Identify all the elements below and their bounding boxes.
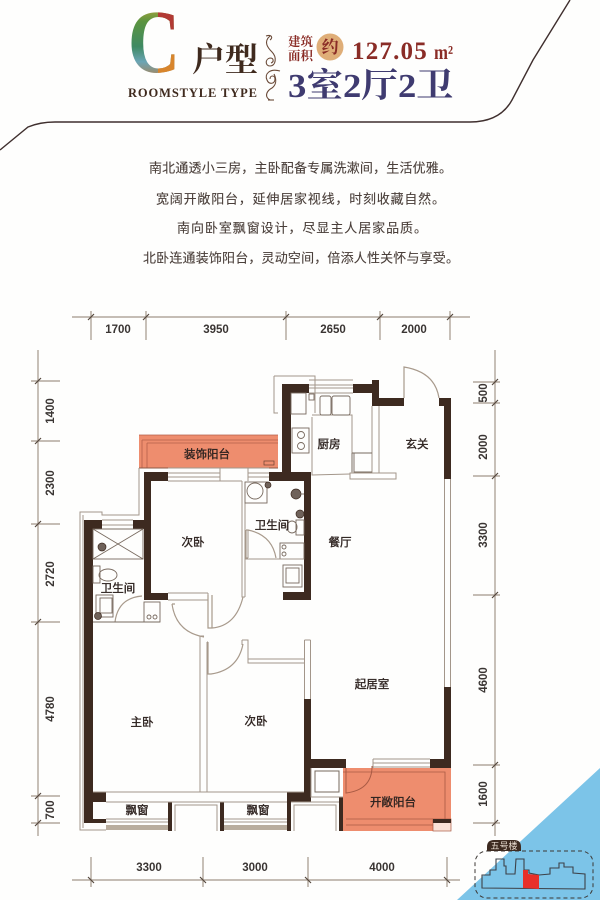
label: bay window 1: 飘窗	[126, 803, 148, 817]
bottom dimensions	[72, 857, 460, 887]
floor plan	[80, 367, 451, 831]
label: bay window 2: 飘窗	[246, 803, 270, 817]
dashed frame	[475, 851, 593, 898]
label: entry: 玄关	[406, 437, 429, 451]
big letter C	[132, 12, 174, 73]
doors	[115, 367, 439, 674]
label: open balcony: 开敞阳台	[370, 795, 416, 809]
decorative balcony	[139, 435, 278, 468]
subtitle: roomstyle type: ROOMSTYLE TYPE	[128, 86, 257, 100]
line 4: 北卧连通装饰阳台，灵动空间，倍添人性关怀与享受。	[143, 250, 459, 266]
second bathroom fixtures	[245, 482, 304, 587]
value 4780: 4780	[45, 696, 57, 722]
value 3300: 3300	[136, 862, 162, 874]
label: dining: 餐厅	[328, 535, 352, 549]
label: living: 起居室	[355, 677, 389, 691]
open balcony	[343, 766, 451, 831]
value 2720: 2720	[45, 561, 57, 587]
value 2300: 2300	[45, 470, 57, 496]
label: kitchen: 厨房	[318, 438, 340, 451]
room labels	[101, 437, 429, 817]
description text	[143, 160, 459, 266]
line 1: 南北通透小三房，主卧配备专属洗漱间，生活优雅。	[149, 160, 452, 176]
location key map	[475, 840, 593, 898]
area label: 建筑	[288, 34, 313, 49]
line 2: 宽阔开敞阳台，延伸居家视线，时刻收藏自然。	[156, 192, 445, 206]
value 2650: 2650	[320, 324, 346, 336]
badge: approx	[316, 34, 344, 60]
value 3950: 3950	[203, 324, 229, 336]
highlighted unit	[523, 870, 539, 889]
partition walls and windows	[93, 380, 450, 831]
label: master bathroom: 卫生间	[101, 581, 135, 595]
value 500: 500	[478, 383, 490, 403]
label: master bedroom: 主卧	[130, 716, 154, 729]
value 2000: 2000	[401, 324, 427, 336]
value 1400: 1400	[45, 398, 57, 424]
value 1600: 1600	[478, 781, 490, 807]
title block	[128, 12, 453, 101]
value 4000: 4000	[369, 862, 395, 874]
value 3300: 3300	[478, 522, 490, 548]
heading: unit type: 户型	[192, 42, 258, 79]
building tag: 五号楼	[490, 840, 518, 851]
right dimensions	[473, 350, 500, 836]
badge: approx: 约	[322, 38, 338, 57]
title block: 面积	[288, 48, 314, 63]
value 4600: 4600	[478, 667, 490, 693]
value 700: 700	[45, 800, 57, 820]
area unit: m²	[434, 42, 453, 64]
value 3000: 3000	[242, 862, 268, 874]
value 2000: 2000	[478, 434, 490, 460]
blue corner background	[457, 768, 600, 900]
header divider curve	[0, 0, 570, 150]
label: decorative balcony: 装饰阳台	[184, 447, 230, 461]
label: bedroom south: 次卧	[244, 714, 268, 728]
building outline	[482, 859, 585, 889]
value 1700: 1700	[105, 324, 131, 336]
area value: 127.05	[352, 38, 428, 65]
master bathroom fixtures	[93, 529, 160, 622]
top dimensions	[72, 311, 470, 340]
left dimensions	[31, 350, 60, 836]
kitchen fixtures	[291, 393, 372, 472]
label: bedroom north: 次卧	[182, 535, 205, 549]
outer contour lines	[80, 376, 315, 830]
load-bearing walls	[84, 380, 451, 831]
ornament scrolls	[266, 35, 280, 100]
label: bathroom: 卫生间	[255, 518, 289, 532]
room count: 3室2厅2卫	[288, 67, 453, 105]
line 3: 南向卧室飘窗设计，尽显主人居家品质。	[177, 220, 427, 236]
